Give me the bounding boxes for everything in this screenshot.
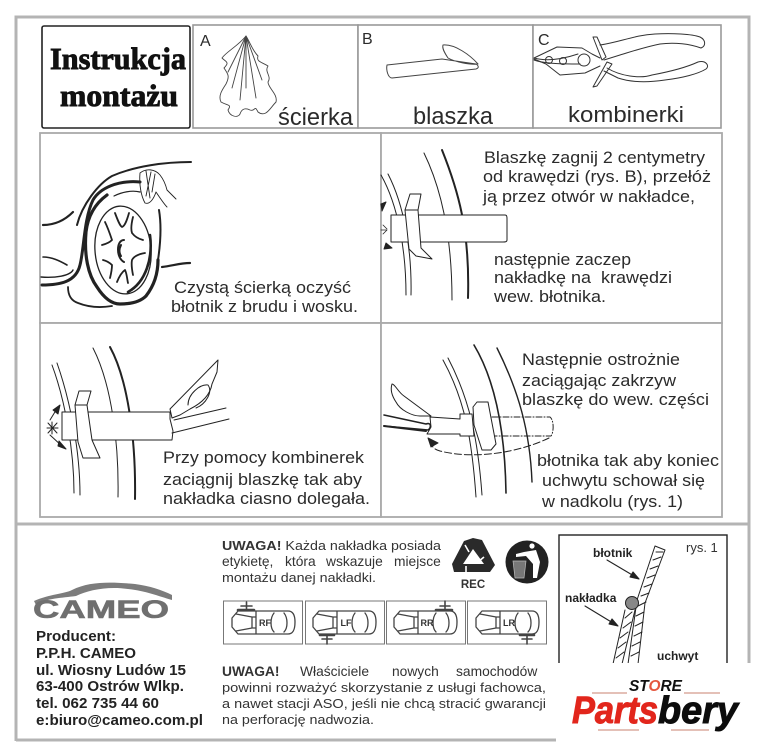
panel: B strip: blaszka xyxy=(413,103,494,130)
panel: A cloth: A xyxy=(200,33,211,50)
panel: step 1 clean xyxy=(40,133,381,323)
icon: litter bin xyxy=(506,540,548,584)
panel: step 4 tuck xyxy=(381,323,722,517)
illustration: strip tucked into arch xyxy=(384,345,553,497)
logo: Partsbery store xyxy=(556,663,761,754)
car RF xyxy=(232,602,295,634)
car LF: LF xyxy=(340,618,352,628)
hatched fender section xyxy=(628,546,665,664)
panel: C pliers xyxy=(533,25,721,128)
car RR: RR xyxy=(420,618,434,628)
car RF: RF xyxy=(259,618,271,628)
notice: warranty: Właściciele xyxy=(300,664,369,679)
car LF xyxy=(313,611,376,644)
car LR xyxy=(476,611,539,644)
notice: label: która xyxy=(285,554,316,569)
notice: label xyxy=(222,539,441,585)
notice: warranty: samochodów xyxy=(456,664,537,679)
logo: Cameo: CAMEO xyxy=(33,596,169,624)
logo: Partsbery store: bery xyxy=(658,690,740,732)
producer address: 63-400 Ostrów Wlkp. xyxy=(36,679,184,695)
notice: warranty: a nawet stacji ASO, jeśli nie chcą stracić gwarancji xyxy=(222,697,546,711)
car position diagrams xyxy=(224,601,546,644)
panel: step 3 pliers: zaciągnij blaszkę tak aby xyxy=(163,471,363,489)
arrows xyxy=(585,560,639,626)
car RR xyxy=(394,601,457,634)
illustration: strip through cover xyxy=(381,150,507,300)
panel: step 1 clean: Czystą ścierką oczyść xyxy=(174,279,351,297)
panel: step 2 bend: następnie zaczep xyxy=(494,251,631,269)
panel: step 2 bend: od krawędzi (rys. B), przełóż xyxy=(483,168,711,186)
notice: warranty: na perforację nadwozia. xyxy=(222,713,374,727)
notice: label: montażu danej nakładki. xyxy=(222,571,376,585)
panel: step 4 tuck: Następnie ostrożnie xyxy=(522,351,680,369)
notice: label: wskazuje xyxy=(325,554,383,569)
diagram: rys. 1: błotnik xyxy=(593,546,633,560)
title box: montażu xyxy=(60,78,178,113)
panel: B strip xyxy=(358,25,533,130)
panel: C pliers: C xyxy=(538,32,550,49)
producer address xyxy=(36,629,203,729)
panel: B strip: B xyxy=(362,31,373,48)
diagram: rys. 1: uchwyt xyxy=(657,649,698,663)
icon: recycling symbol xyxy=(452,538,495,591)
notice: label: miejsce xyxy=(394,554,441,569)
panel: step 2 bend: ją przez otwór w nakładce, xyxy=(482,188,695,206)
notice: warranty xyxy=(222,664,546,727)
panel: step 2 bend: wew. błotnika. xyxy=(493,288,606,306)
panel: C pliers: kombinerki xyxy=(568,102,684,127)
panel: A cloth xyxy=(193,25,358,131)
notice: warranty: powinni rozważyć skorzystanie z usługi fachowca, xyxy=(222,681,546,695)
logo: Partsbery store: Parts xyxy=(572,690,658,732)
notice: warranty: UWAGA! xyxy=(222,664,279,679)
logo: Cameo xyxy=(33,583,172,624)
panel: step 2 bend: nakładkę na krawędzi xyxy=(494,269,672,287)
illustration: pulling strip with pliers xyxy=(47,347,229,499)
producer address: tel. 062 735 44 60 xyxy=(36,696,159,712)
illustration: wheel and fender xyxy=(41,162,191,307)
panel: A cloth: ścierka xyxy=(278,104,354,131)
notice: warranty: nowych xyxy=(392,664,439,679)
panel: step 3 pliers xyxy=(40,323,381,517)
panel: step 3 pliers: nakładka ciasno dolegała. xyxy=(163,490,370,508)
title box: Instrukcja xyxy=(50,41,186,76)
panel: step 1 clean: błotnik z brudu i wosku. xyxy=(171,298,358,316)
panel: step 4 tuck: blaszkę do wew. części xyxy=(522,391,709,409)
hatched cover section xyxy=(613,596,638,664)
notice: label: UWAGA! Każda nakładka posiada xyxy=(222,539,441,553)
panel: step 2 bend xyxy=(381,133,722,323)
diagram: rys. 1: nakładka xyxy=(565,591,617,605)
panel: step 4 tuck: w nadkolu (rys. 1) xyxy=(541,493,683,511)
title box xyxy=(42,26,190,128)
panel: step 4 tuck: uchwytu schował się xyxy=(542,472,705,490)
logo: Partsbery store: STORE xyxy=(629,678,683,695)
car LR: LR xyxy=(503,618,515,628)
panel: step 3 pliers: Przy pomocy kombinerek xyxy=(163,449,365,467)
producer address: Producent: xyxy=(36,629,116,645)
panel: step 4 tuck: błotnika tak aby koniec xyxy=(537,452,719,470)
diagram: rys. 1: rys. 1 xyxy=(686,540,718,555)
producer address: ul. Wiosny Ludów 15 xyxy=(36,663,186,679)
icon: recycling symbol: REC xyxy=(461,579,485,591)
panel: step 4 tuck: zaciągając zakrzyw xyxy=(522,372,676,390)
panel: step 2 bend: Blaszkę zagnij 2 centymetry xyxy=(484,149,706,167)
producer address: P.P.H. CAMEO xyxy=(36,646,136,662)
icon: cloth xyxy=(220,36,276,116)
icon: pliers xyxy=(534,34,708,87)
notice: label: etykietę, xyxy=(222,554,273,569)
producer address: e:biuro@cameo.com.pl xyxy=(36,713,203,729)
diagram: rys. 1 xyxy=(559,535,727,675)
icon: bent metal strip xyxy=(387,45,478,78)
